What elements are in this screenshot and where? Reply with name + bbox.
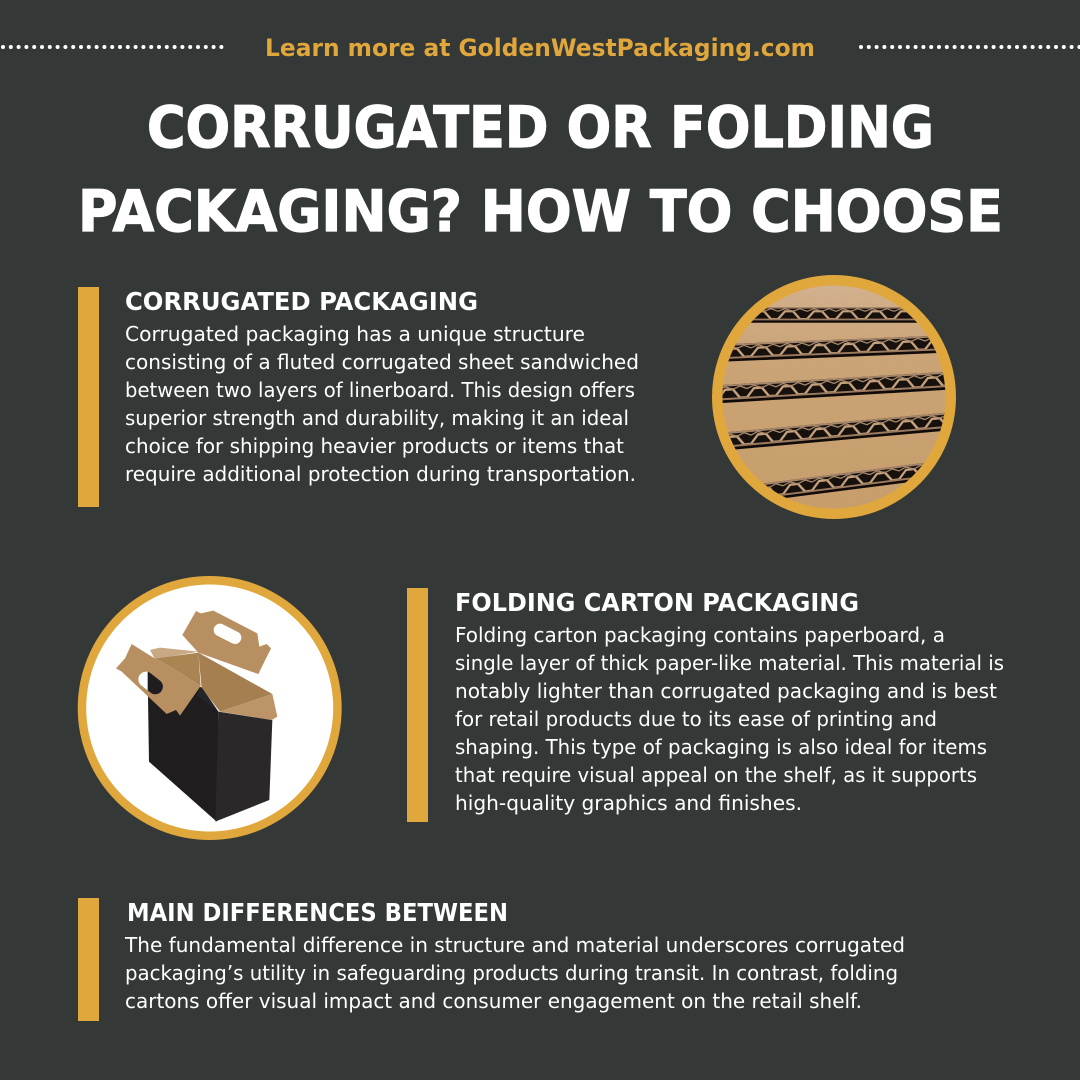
heading: CORRUGATED PACKAGING <box>125 287 478 316</box>
body text: shaping. This type of packaging is also ideal for items <box>455 735 987 759</box>
body text: consisting of a fluted corrugated sheet sandwiched <box>125 350 639 374</box>
image: open black carton box <box>78 576 342 840</box>
website link: Learn more at GoldenWestPackaging.com <box>265 34 815 62</box>
body text: for retail products due to its ease of printing and <box>455 707 937 731</box>
body text: choice for shipping heavier products or items that <box>125 434 624 458</box>
body text: packaging’s utility in safeguarding products during transit. In contrast, folding <box>125 961 898 985</box>
dotted line left <box>3 45 222 49</box>
title <box>78 95 1003 245</box>
body text: superior strength and durability, making it an ideal <box>125 406 629 430</box>
image: corrugated cardboard layers <box>712 275 965 519</box>
body text: notably lighter than corrugated packaging and is best <box>455 679 997 703</box>
body text: single layer of thick paper-like material. This material is <box>455 651 1004 675</box>
title: CORRUGATED OR FOLDING <box>147 95 934 161</box>
body text: that require visual appeal on the shelf, as it supports <box>455 763 977 787</box>
panel: folding carton packaging <box>78 576 1004 840</box>
panel: main differences <box>78 898 905 1021</box>
heading: FOLDING CARTON PACKAGING <box>455 588 859 617</box>
heading: MAIN DIFFERENCES BETWEEN <box>127 898 508 927</box>
body text: require additional protection during transportation. <box>125 462 636 486</box>
dotted line right <box>861 45 1080 49</box>
accent bar <box>407 588 428 822</box>
body text: Folding carton packaging contains paperboard, a <box>455 623 945 647</box>
panel: corrugated packaging <box>78 275 965 519</box>
accent bar <box>78 898 99 1021</box>
body text: high-quality graphics and finishes. <box>455 791 802 815</box>
body text <box>124 933 905 1013</box>
body text: cartons offer visual impact and consumer engagement on the retail shelf. <box>125 989 862 1013</box>
title: PACKAGING? HOW TO CHOOSE <box>78 179 1003 245</box>
body text: The fundamental difference in structure and material underscores corrugated <box>124 933 905 957</box>
body text: Corrugated packaging has a unique structure <box>125 322 585 346</box>
body text <box>125 322 639 486</box>
body text <box>455 623 1004 815</box>
accent bar <box>78 287 99 507</box>
body text: between two layers of linerboard. This design offers <box>125 378 635 402</box>
